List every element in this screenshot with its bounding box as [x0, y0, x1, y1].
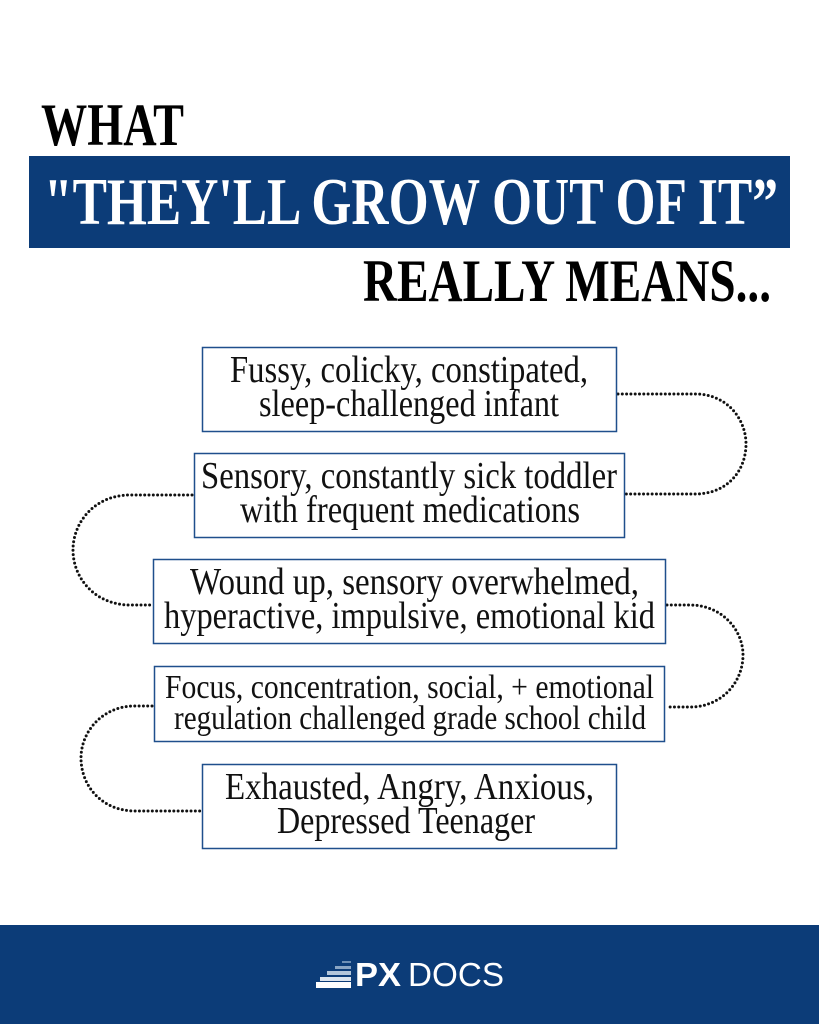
logo: PX Docs: DOCS — [408, 957, 504, 994]
box: teenager: Depressed Teenager — [277, 800, 535, 842]
box: teenager — [202, 764, 616, 848]
logo wordmark: PX — [355, 957, 402, 994]
box: toddler — [194, 454, 624, 538]
connector: infant to toddler — [618, 394, 746, 494]
box: kid: Wound up, sensory overwhelmed, — [190, 561, 639, 603]
connector: kid to grade school child — [666, 605, 743, 707]
box: teenager: Exhausted, Angry, Anxious, — [225, 766, 594, 808]
icon: stacked steps — [316, 961, 351, 988]
box: grade school child: regulation challenged grade school child — [174, 700, 646, 737]
box: infant: sleep-challenged infant — [259, 383, 559, 425]
connector: toddler to kid — [73, 495, 192, 605]
box: kid: hyperactive, impulsive, emotional kid — [164, 595, 655, 637]
box: grade school child — [154, 666, 664, 742]
connector: grade school child to teenager — [81, 706, 201, 811]
logo: PX Docs — [316, 957, 504, 994]
box: kid — [154, 560, 666, 644]
title: what: WHAT — [41, 92, 184, 158]
box: toddler: Sensory, constantly sick toddler — [201, 455, 617, 497]
box: infant: Fussy, colicky, constipated, — [230, 349, 588, 391]
footer band — [0, 925, 819, 1024]
box: infant — [202, 348, 616, 432]
box: grade school child: Focus, concentration, social, + emotional — [165, 669, 654, 706]
box: toddler: with frequent medications — [240, 489, 580, 531]
